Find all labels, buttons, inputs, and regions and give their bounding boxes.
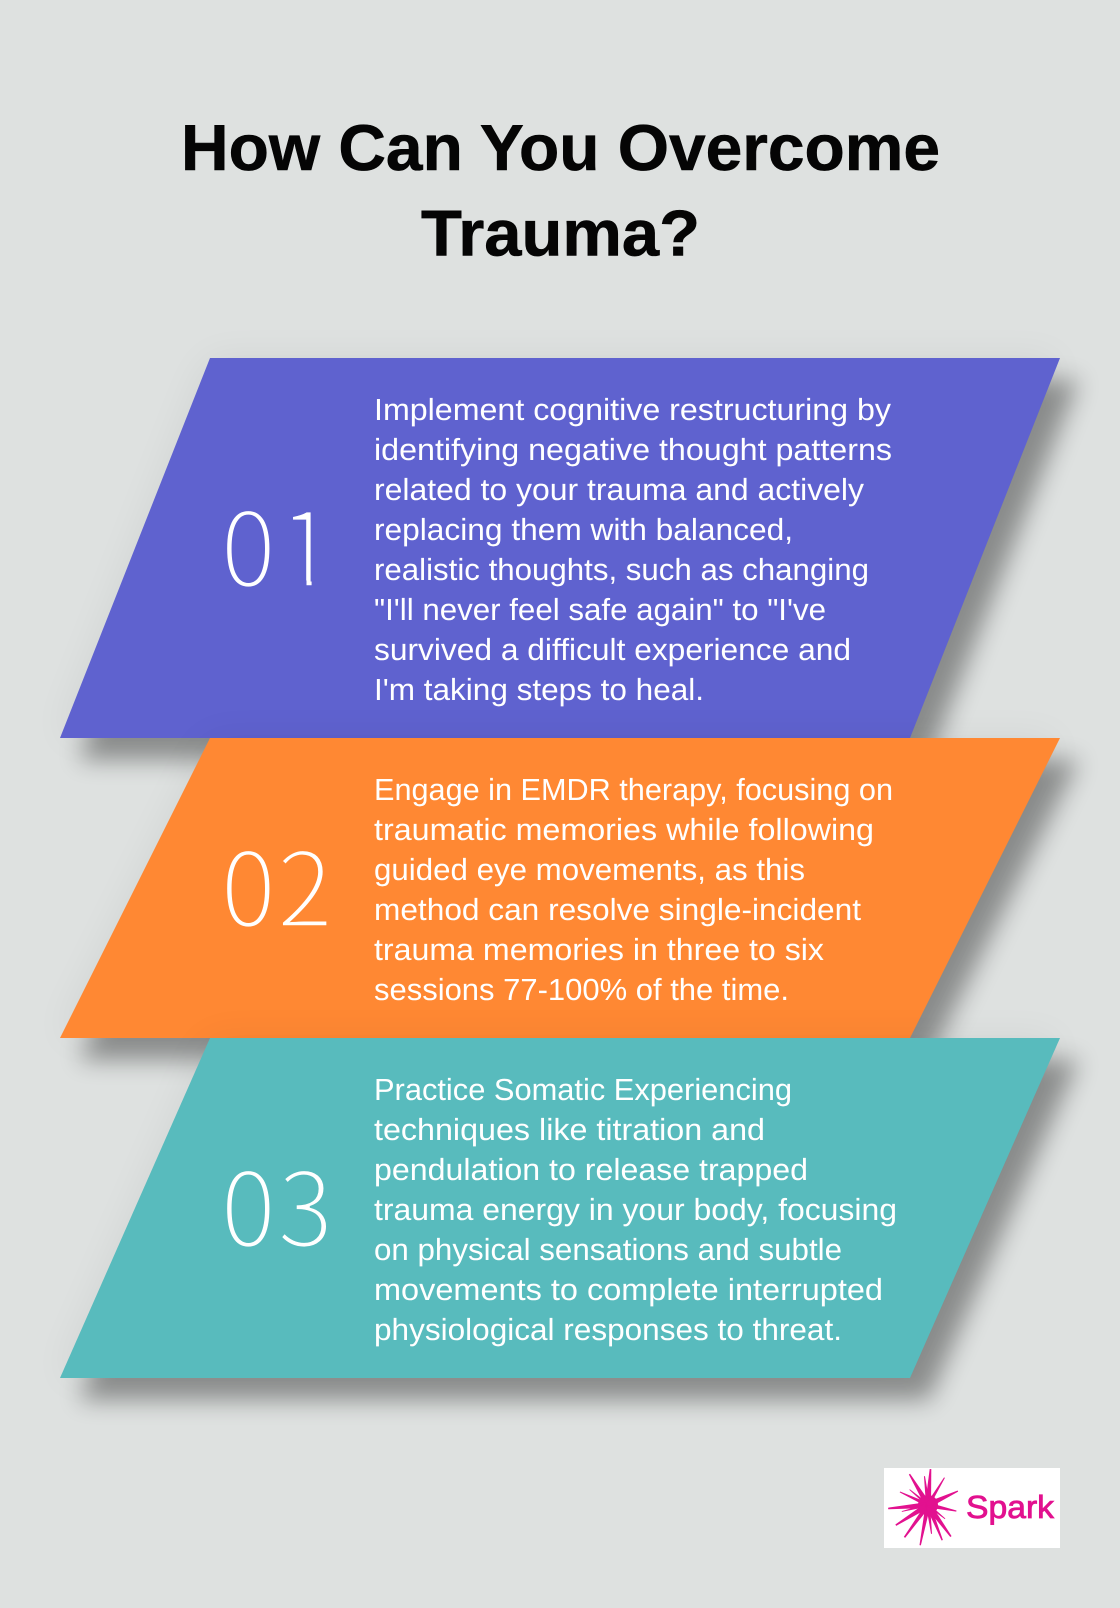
number 03: 03 — [221, 1129, 333, 1276]
panel: step 03 — [60, 1038, 1079, 1400]
text: step 01 description: related to your trauma and actively — [374, 473, 865, 507]
text: step 02 description: trauma memories in three to six — [374, 933, 824, 967]
text: step 01 description: survived a difficult experience and — [374, 633, 851, 667]
text: step 02 description: traumatic memories while following — [374, 813, 874, 847]
text: step 01 description: realistic thoughts, such as changing — [374, 553, 869, 587]
text: step 01 description: I'm taking steps to heal. — [374, 673, 704, 707]
text: step 02 description: guided eye movements, as this — [374, 853, 805, 887]
text: step 01 description — [374, 393, 892, 707]
text: step 03 description: pendulation to release trapped — [374, 1153, 808, 1187]
text: step 03 description: physiological responses to threat. — [374, 1313, 842, 1347]
text: step 03 description: on physical sensations and subtle — [374, 1233, 842, 1267]
title — [181, 111, 940, 270]
text: step 02 description — [374, 773, 893, 1007]
text: step 02 description: Engage in EMDR therapy, focusing on — [374, 773, 893, 807]
text: step 02 description: sessions 77-100% of the time. — [374, 973, 789, 1007]
text: step 01 description: identifying negative thought patterns — [374, 433, 892, 467]
icon: starburst — [888, 1469, 959, 1546]
text: step 01 description: Implement cognitive restructuring by — [374, 393, 892, 427]
text: step 03 description: movements to complete interrupted — [374, 1273, 883, 1307]
text: step 02 description: method can resolve single-incident — [374, 893, 862, 927]
title: Trauma? — [421, 196, 700, 270]
logo wordmark: Spark — [966, 1489, 1055, 1525]
number 01: 01 — [221, 469, 334, 616]
text: step 03 description: trauma energy in your body, focusing — [374, 1193, 897, 1227]
logo: Spark — [884, 1468, 1060, 1548]
text: step 01 description: "I'll never feel safe again" to "I've — [374, 593, 826, 627]
number 02: 02 — [221, 809, 332, 956]
panel: step 02 — [60, 738, 1079, 1060]
title: How Can You Overcome — [181, 111, 940, 184]
text: step 01 description: replacing them with balanced, — [374, 513, 793, 547]
text: step 03 description: Practice Somatic Experiencing — [374, 1073, 792, 1107]
panel: step 01 — [60, 358, 1079, 760]
text: step 03 description — [374, 1073, 897, 1347]
text: step 03 description: techniques like titration and — [374, 1113, 765, 1147]
